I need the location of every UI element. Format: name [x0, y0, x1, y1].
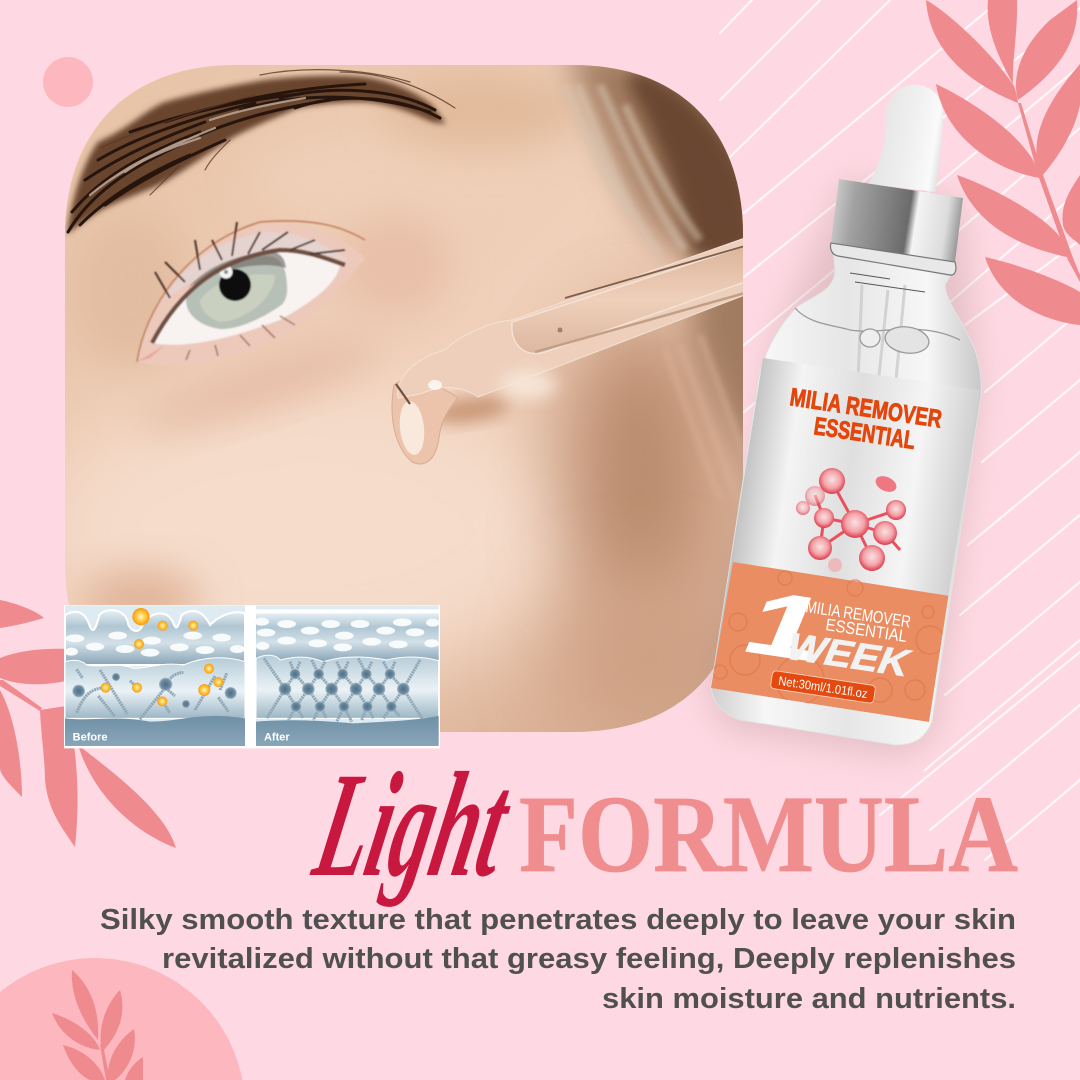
1 week text [730, 573, 917, 684]
white inset frame [64, 605, 440, 748]
bottle title [788, 383, 944, 455]
net volume badge: Net:30ml/1.01fl.oz [777, 674, 868, 701]
paper label [711, 358, 980, 722]
glass body [711, 245, 981, 745]
body text: Silky smooth texture that penetrates deeply to leave your skin [100, 904, 1016, 936]
orange band [711, 562, 950, 722]
label: after: After [264, 732, 290, 744]
serum bottle [711, 85, 981, 745]
skin light and shade [40, 70, 740, 740]
eyebrow [67, 70, 455, 234]
dropper and serum drop [392, 238, 745, 464]
body text [100, 904, 1016, 1015]
before panel [65, 605, 245, 746]
photo: face with dropper [65, 65, 743, 732]
bottle title: MILIA REMOVER [788, 383, 944, 434]
eye [137, 221, 365, 365]
leaf branch bottom left [0, 600, 176, 848]
heading: Light: Light [302, 741, 524, 908]
small leaf sprig in circle [52, 970, 143, 1080]
1 week text: MILIA REMOVER [804, 597, 912, 632]
leaf branch top right [926, 0, 1080, 325]
skin base [65, 65, 743, 732]
hair [554, 65, 743, 471]
bottle shadow [705, 180, 980, 758]
liquid surface and bubbles [795, 273, 960, 356]
body text: skin moisture and nutrients. [602, 983, 1016, 1015]
inset: before and after skin diagram [64, 605, 440, 748]
metal collar [831, 179, 963, 262]
1 week text: 1 [730, 573, 842, 679]
1 week text: WEEK [780, 626, 917, 684]
bottle title: ESSENTIAL [812, 412, 917, 455]
molecule graphic [796, 468, 906, 572]
1 week text: ESSENTIAL [824, 615, 908, 646]
decorative circle bottom left [0, 958, 242, 1080]
inner glass tube [858, 285, 905, 390]
after panel [254, 605, 439, 746]
heading: FORMULA: FORMULA [519, 773, 1018, 895]
decorative circle top left [43, 57, 93, 107]
body text: revitalized without that greasy feeling, Deeply replenishes [162, 943, 1016, 975]
label: before: Before [73, 732, 107, 744]
dropper bulb [868, 85, 943, 192]
